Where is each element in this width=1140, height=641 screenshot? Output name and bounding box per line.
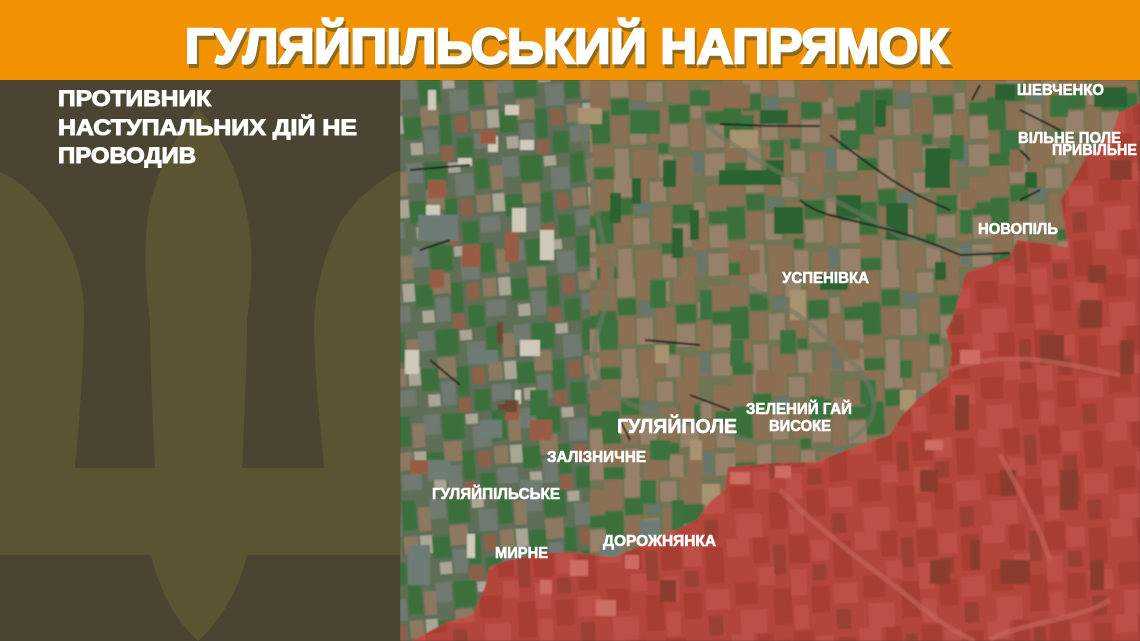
- label: Uspenivka: УСПЕНІВКА: [782, 270, 869, 287]
- map: dark creeks: [410, 85, 1060, 440]
- title banner: [0, 0, 1140, 80]
- subtitle text: ПРОТИВНИК: [58, 86, 212, 111]
- subtitle text: [58, 86, 357, 168]
- red zone: pale streaks: [780, 359, 1120, 641]
- subtitle text: ПРОВОДИВ: [58, 143, 196, 168]
- left panel background: [0, 80, 400, 641]
- label: Zaliznychne: ЗАЛІЗНИЧНЕ: [547, 449, 646, 466]
- label: Myrne: МИРНЕ: [495, 545, 548, 562]
- map: individual fields: [405, 84, 1127, 585]
- label: Dorozhnianka: ДОРОЖНЯНКА: [603, 533, 716, 550]
- title: ГУЛЯЙПІЛЬСЬКИЙ НАПРЯМОК: [185, 19, 949, 74]
- map labels: [432, 82, 1137, 562]
- satellite map: [400, 80, 1140, 641]
- label: Huliaipole: ГУЛЯЙПОЛЕ: [617, 414, 737, 438]
- map: river valleys: [575, 120, 1000, 445]
- map: Russian-occupied red zone: [411, 103, 1140, 641]
- icon: trident emblem: [0, 108, 400, 641]
- label: Huliaipilske: ГУЛЯЙПІЛЬСЬКЕ: [432, 485, 560, 503]
- subtitle text: НАСТУПАЛЬНИХ ДІЙ НЕ: [58, 115, 357, 140]
- label: Novopil: НОВОПІЛЬ: [978, 221, 1058, 238]
- red zone: pale fields: [540, 350, 980, 616]
- map: farmland west: [400, 80, 600, 641]
- label: Vysoke: ВИСОКЕ: [769, 418, 831, 435]
- label: Shevchenko: ШЕВЧЕНКО: [1017, 82, 1104, 99]
- label: Zelenyi Hai: ЗЕЛЕНИЙ ГАЙ: [746, 400, 852, 418]
- red zone: darker fields: [660, 160, 1134, 602]
- map: farmland centre and east: [590, 80, 1140, 641]
- label: Vilne Pole: ВІЛЬНЕ ПОЛЕ: [1018, 130, 1121, 147]
- title: ГУЛЯЙПІЛЬСЬКИЙ НАПРЯМОК: [187, 23, 951, 78]
